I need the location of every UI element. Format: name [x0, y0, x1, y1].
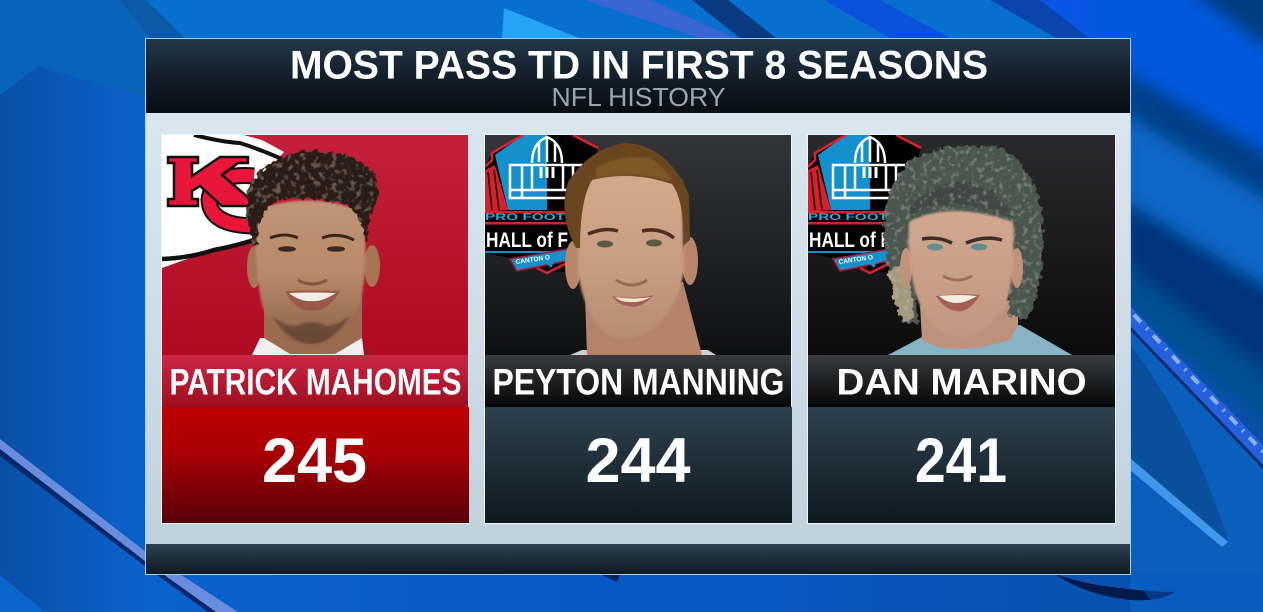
hair light ends	[888, 262, 914, 322]
lower-left stripe	[0, 439, 238, 612]
name banner	[808, 355, 1115, 407]
right side light bands	[1090, 0, 1263, 440]
beard	[272, 316, 350, 344]
face	[254, 199, 367, 314]
value panel: 244	[585, 426, 691, 496]
light blue stripe	[1130, 458, 1228, 547]
shirt collar	[570, 350, 716, 355]
photo: Patrick Mahomes with Chiefs logo	[162, 134, 468, 355]
icon: Hall of Fame logo: PRO FOOT	[485, 212, 565, 223]
card: Dan Marino	[807, 134, 1116, 524]
value panel	[162, 407, 469, 523]
main panel	[146, 38, 1130, 574]
icon: Hall of Fame logo: HALL of F	[809, 229, 891, 252]
neck	[585, 282, 702, 355]
hair	[564, 143, 690, 248]
ears	[900, 248, 912, 288]
value panel	[485, 407, 792, 523]
icon: Chiefs arrowhead logo	[162, 134, 284, 268]
shirt	[240, 342, 378, 355]
title bar	[146, 39, 1130, 113]
smile	[936, 294, 980, 311]
hair	[884, 146, 1043, 324]
card: Patrick Mahomes	[161, 134, 469, 524]
name banner: DAN MARINO	[836, 360, 1086, 402]
value panel	[808, 407, 1115, 523]
icon: Hall of Fame logo	[808, 135, 921, 273]
name banner: PATRICK MAHOMES	[170, 360, 462, 402]
title: MOST PASS TD IN FIRST 8 SEASONS	[290, 44, 988, 88]
icon: Hall of Fame logo: HALL of F	[486, 229, 568, 252]
name banner: PEYTON MANNING	[492, 360, 784, 402]
footer bar	[146, 544, 1130, 574]
shirt	[888, 325, 1072, 355]
neck	[264, 295, 362, 354]
brows, eyes	[588, 230, 674, 238]
mouth	[612, 295, 654, 307]
nose	[943, 276, 972, 280]
name banner	[162, 355, 468, 407]
neck	[920, 300, 1018, 349]
hair	[247, 151, 378, 245]
nose	[616, 280, 647, 285]
icon: Hall of Fame logo	[485, 135, 598, 273]
smile	[285, 290, 340, 311]
icon: Hall of Fame logo: CANTON O	[838, 254, 874, 266]
brows, eyes	[270, 235, 354, 240]
forelock	[905, 182, 1015, 220]
face	[907, 210, 1016, 312]
card: Peyton Manning	[484, 134, 792, 524]
brows, eyes	[922, 238, 1002, 243]
dark lower-right arc	[1055, 574, 1175, 600]
photo: Peyton Manning with Hall of Fame logo	[485, 135, 791, 355]
dotted light stripe	[1130, 306, 1263, 465]
icon: Hall of Fame logo: PRO FOOT	[808, 212, 888, 223]
value panel: 241	[915, 426, 1007, 496]
ears	[247, 246, 260, 288]
subtitle: NFL HISTORY	[552, 82, 726, 112]
icon: Hall of Fame logo: CANTON O	[515, 254, 551, 266]
ears	[565, 241, 581, 289]
nose	[298, 280, 327, 284]
right side lower panel	[1130, 318, 1263, 612]
photo: Dan Marino with Hall of Fame logo	[808, 135, 1115, 355]
value panel: 245	[262, 426, 367, 496]
face	[578, 172, 684, 339]
